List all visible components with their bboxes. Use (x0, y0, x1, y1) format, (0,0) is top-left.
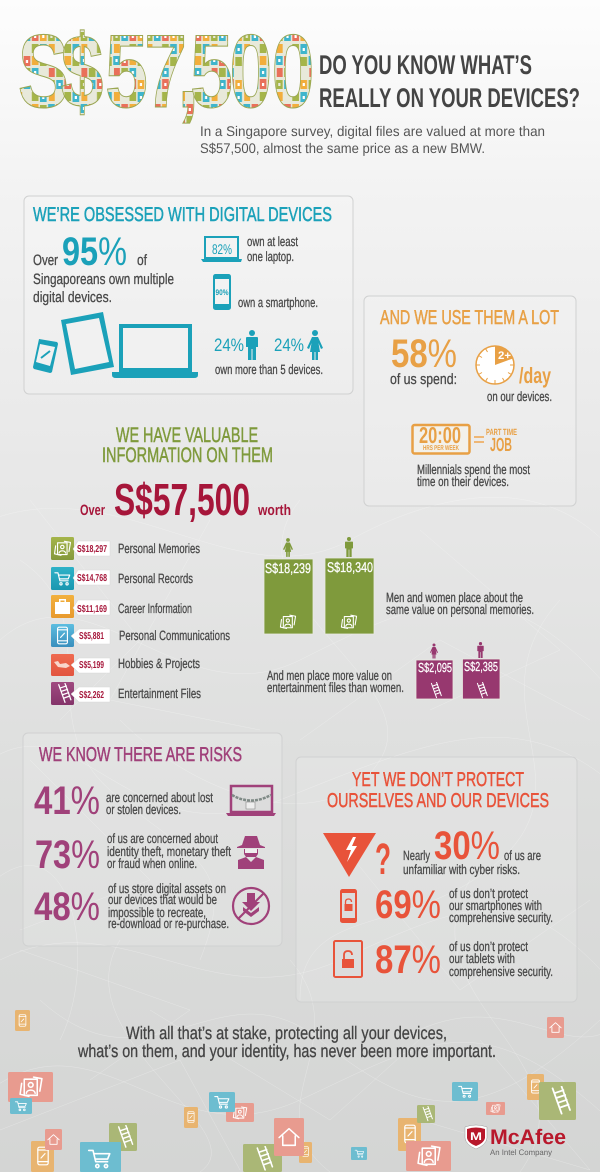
icon: phone 90 percent: 90% (216, 288, 228, 297)
logo: McAfee: McAfee (490, 1126, 566, 1149)
heading: we have valuable information (102, 424, 273, 467)
panel heading: WE KNOW THERE ARE RISKS (39, 744, 242, 766)
intro text (200, 123, 545, 156)
icon: chained laptop (226, 786, 276, 816)
row: personal records: Personal Records (118, 571, 193, 586)
chart: entertainment women (416, 644, 453, 699)
stat: 24 percent women: 24% (274, 335, 304, 355)
stat: over S$57,500 worth: S$57,500 (114, 474, 250, 525)
icon: phone 90 percent (213, 274, 231, 310)
stat: 73 percent: or fraud when online. (107, 856, 197, 871)
icon: phone with lock (340, 889, 357, 923)
row: career information (51, 595, 192, 618)
stat: over S$57,500 worth: worth (257, 502, 291, 519)
stat: 48 percent: 48% (34, 885, 100, 929)
text: entertainment note: And men place more value on (267, 668, 392, 683)
logo: McAfee: An Intel Company (490, 1148, 552, 1157)
chart: entertainment men: S$2,385 (464, 659, 498, 674)
stat: over S$57,500 worth: Over (80, 502, 105, 519)
decorative file tiles (8, 1010, 576, 1172)
intro text: S$57,500, almost the same price as a new BMW. (200, 140, 485, 156)
stat: over 95 percent: Singaporeans own multiple (33, 271, 174, 288)
panel: we don't protect ourselves (296, 757, 577, 1002)
panel: obsessed with digital devices (24, 196, 353, 394)
icon: clock 2+ hours (476, 346, 514, 384)
stat: over 95 percent: 95% (62, 230, 127, 274)
stat: 30 percent (403, 824, 541, 877)
list: value by file type (51, 537, 230, 705)
stat: 87 percent: 87% (375, 938, 441, 982)
row: hobbies and projects (51, 654, 200, 676)
stat: 87 percent: our tablets with (449, 951, 515, 966)
chart: personal memories men: S$18,340 (327, 559, 373, 575)
heading: do you know what's really on your devices (319, 50, 580, 113)
row: career information: S$11,169 (77, 604, 107, 615)
icon: 20 hours per week clock (412, 422, 470, 454)
stat: 58 percent: of us spend: (390, 371, 457, 388)
stat: 58 percent: 58% (391, 332, 457, 376)
stat: 30 percent: 30% (434, 824, 500, 868)
row: personal memories (51, 537, 200, 560)
chart: entertainment women: S$2,095 (418, 660, 452, 675)
text: own a smartphone: own a smartphone. (238, 295, 318, 310)
title: S$57,500 filled with file tiles: S$57,500 (18, 14, 314, 130)
stat: 48 percent: our devices that would be (108, 892, 217, 907)
text: own more than 5 devices: own more than 5 devices. (215, 362, 323, 377)
text: equals part time job (474, 427, 517, 456)
stat: 30 percent: of us are (504, 848, 541, 863)
text: entertainment note (267, 668, 404, 695)
closing statement (77, 1023, 496, 1061)
row: personal communications: S$5,881 (79, 631, 104, 642)
panel heading: WE’RE OBSESSED WITH DIGITAL DEVICES (33, 204, 332, 226)
row: entertainment files (51, 682, 201, 705)
stat: 87 percent: of us don’t protect (449, 939, 528, 954)
icon: warning triangle (323, 833, 391, 884)
row: hobbies and projects: S$5,199 (79, 660, 104, 671)
chart: personal memories men (325, 537, 374, 634)
stat: 69 percent: of us don’t protect (449, 886, 528, 901)
text: equals part time job: PART TIME (486, 427, 517, 437)
text: memories note (386, 590, 534, 617)
stat: 30 percent: Nearly (403, 848, 430, 863)
stat: 87 percent (375, 938, 553, 982)
closing statement: what’s on them, and your identity, has never been more important. (77, 1041, 496, 1061)
heading: we have valuable information: WE HAVE VALUABLE (116, 424, 258, 447)
chart: personal memories women: S$18,239 (265, 560, 311, 576)
stat: 73 percent: 73% (35, 833, 100, 877)
icon: large laptop (112, 326, 198, 378)
icon: clock 2+ hours: 2+ (498, 350, 511, 362)
stat: over 95 percent: of (137, 252, 148, 269)
row: personal records (51, 567, 193, 590)
row: personal records: S$14,768 (77, 573, 107, 584)
intro text: In a Singapore survey, digital files are valued at more than (200, 123, 545, 139)
text: own at least one laptop: one laptop. (247, 249, 294, 264)
stat: 41 percent: are concerned about lost (106, 790, 213, 805)
stat: 87 percent: comprehensive security. (449, 964, 553, 979)
row: personal memories: Personal Memories (118, 541, 200, 556)
text: millennials (417, 462, 530, 489)
heading: we have valuable information: INFORMATION ON THEM (102, 444, 273, 467)
icon: small phone (33, 339, 58, 373)
stat: 30 percent: unfamiliar with cyber risks. (403, 862, 520, 877)
stat: 41 percent (34, 779, 213, 823)
stat: 41 percent: or stolen devices. (106, 802, 181, 817)
row: personal memories: S$18,297 (77, 544, 107, 555)
stat: 73 percent: of us are concerned about (107, 831, 218, 846)
text: entertainment note: entertainment files than women. (267, 680, 404, 695)
panel heading (327, 769, 549, 812)
icon: tablet (61, 312, 114, 375)
text: own at least one laptop: own at least (247, 234, 298, 249)
icon: shield: M (470, 1131, 482, 1143)
text: memories note: same value on personal memories. (386, 602, 534, 617)
closing statement: With all that’s at stake, protecting all your devices, (126, 1023, 447, 1043)
stat: 69 percent (375, 883, 553, 927)
icon: tablet with lock (334, 941, 362, 977)
stat: 73 percent: identity theft, monetary theft (107, 844, 231, 859)
stat: over 95 percent (33, 230, 174, 306)
text: millennials: Millennials spend the most (417, 462, 530, 477)
panel: we know there are risks (23, 733, 282, 946)
icon: no download (233, 888, 269, 924)
row: hobbies and projects: Hobbies & Projects (118, 656, 200, 671)
stat: 24 percent men: 24% (214, 335, 244, 355)
stat: over 95 percent: Over (33, 252, 58, 269)
stat: 41 percent: 41% (34, 779, 100, 823)
icon: 20 hours per week clock: HRS PER WEEK (423, 445, 459, 452)
text: on our devices: on our devices. (487, 389, 552, 404)
row: entertainment files: S$2,262 (79, 690, 104, 701)
row: personal communications (51, 624, 230, 647)
icon: 20 hours per week clock: 20:00 (419, 422, 461, 448)
chart: personal memories women (264, 538, 313, 634)
text: per day: /day (519, 363, 552, 388)
stat: 48 percent: impossible to recreate, (108, 905, 206, 920)
text: millennials: time on their devices. (417, 474, 509, 489)
row: personal communications: Personal Communications (119, 628, 230, 643)
row: entertainment files: Entertainment Files (118, 686, 201, 701)
stat: 24 percent women (274, 330, 323, 360)
icon: warning triangle: ? (375, 835, 391, 884)
stat: over 95 percent: digital devices. (33, 289, 112, 306)
logo: McAfee (465, 1125, 566, 1157)
stat: 48 percent (34, 881, 229, 931)
icon: laptop 82 percent: 82% (212, 241, 232, 257)
icon: laptop 82 percent (201, 237, 242, 262)
icon: spy (237, 836, 265, 869)
stat: 69 percent: comprehensive security. (449, 910, 553, 925)
text: memories note: Men and women place about the (386, 590, 523, 605)
text: equals part time job: JOB (490, 435, 512, 456)
stat: 48 percent: re-download or re-purchase. (108, 916, 229, 931)
stat: 69 percent: our smartphones with (449, 898, 542, 913)
stat: 69 percent: 69% (375, 883, 441, 927)
panel: we use them a lot (364, 296, 576, 506)
chart: entertainment men (462, 642, 500, 699)
panel heading: YET WE DON’T PROTECT (352, 769, 524, 791)
stat: 73 percent (35, 831, 231, 877)
stat: 24 percent men (214, 330, 258, 360)
text: own at least one laptop (247, 234, 298, 264)
row: career information: Career Information (118, 601, 192, 616)
stat: 48 percent: of us store digital assets on (108, 881, 226, 896)
